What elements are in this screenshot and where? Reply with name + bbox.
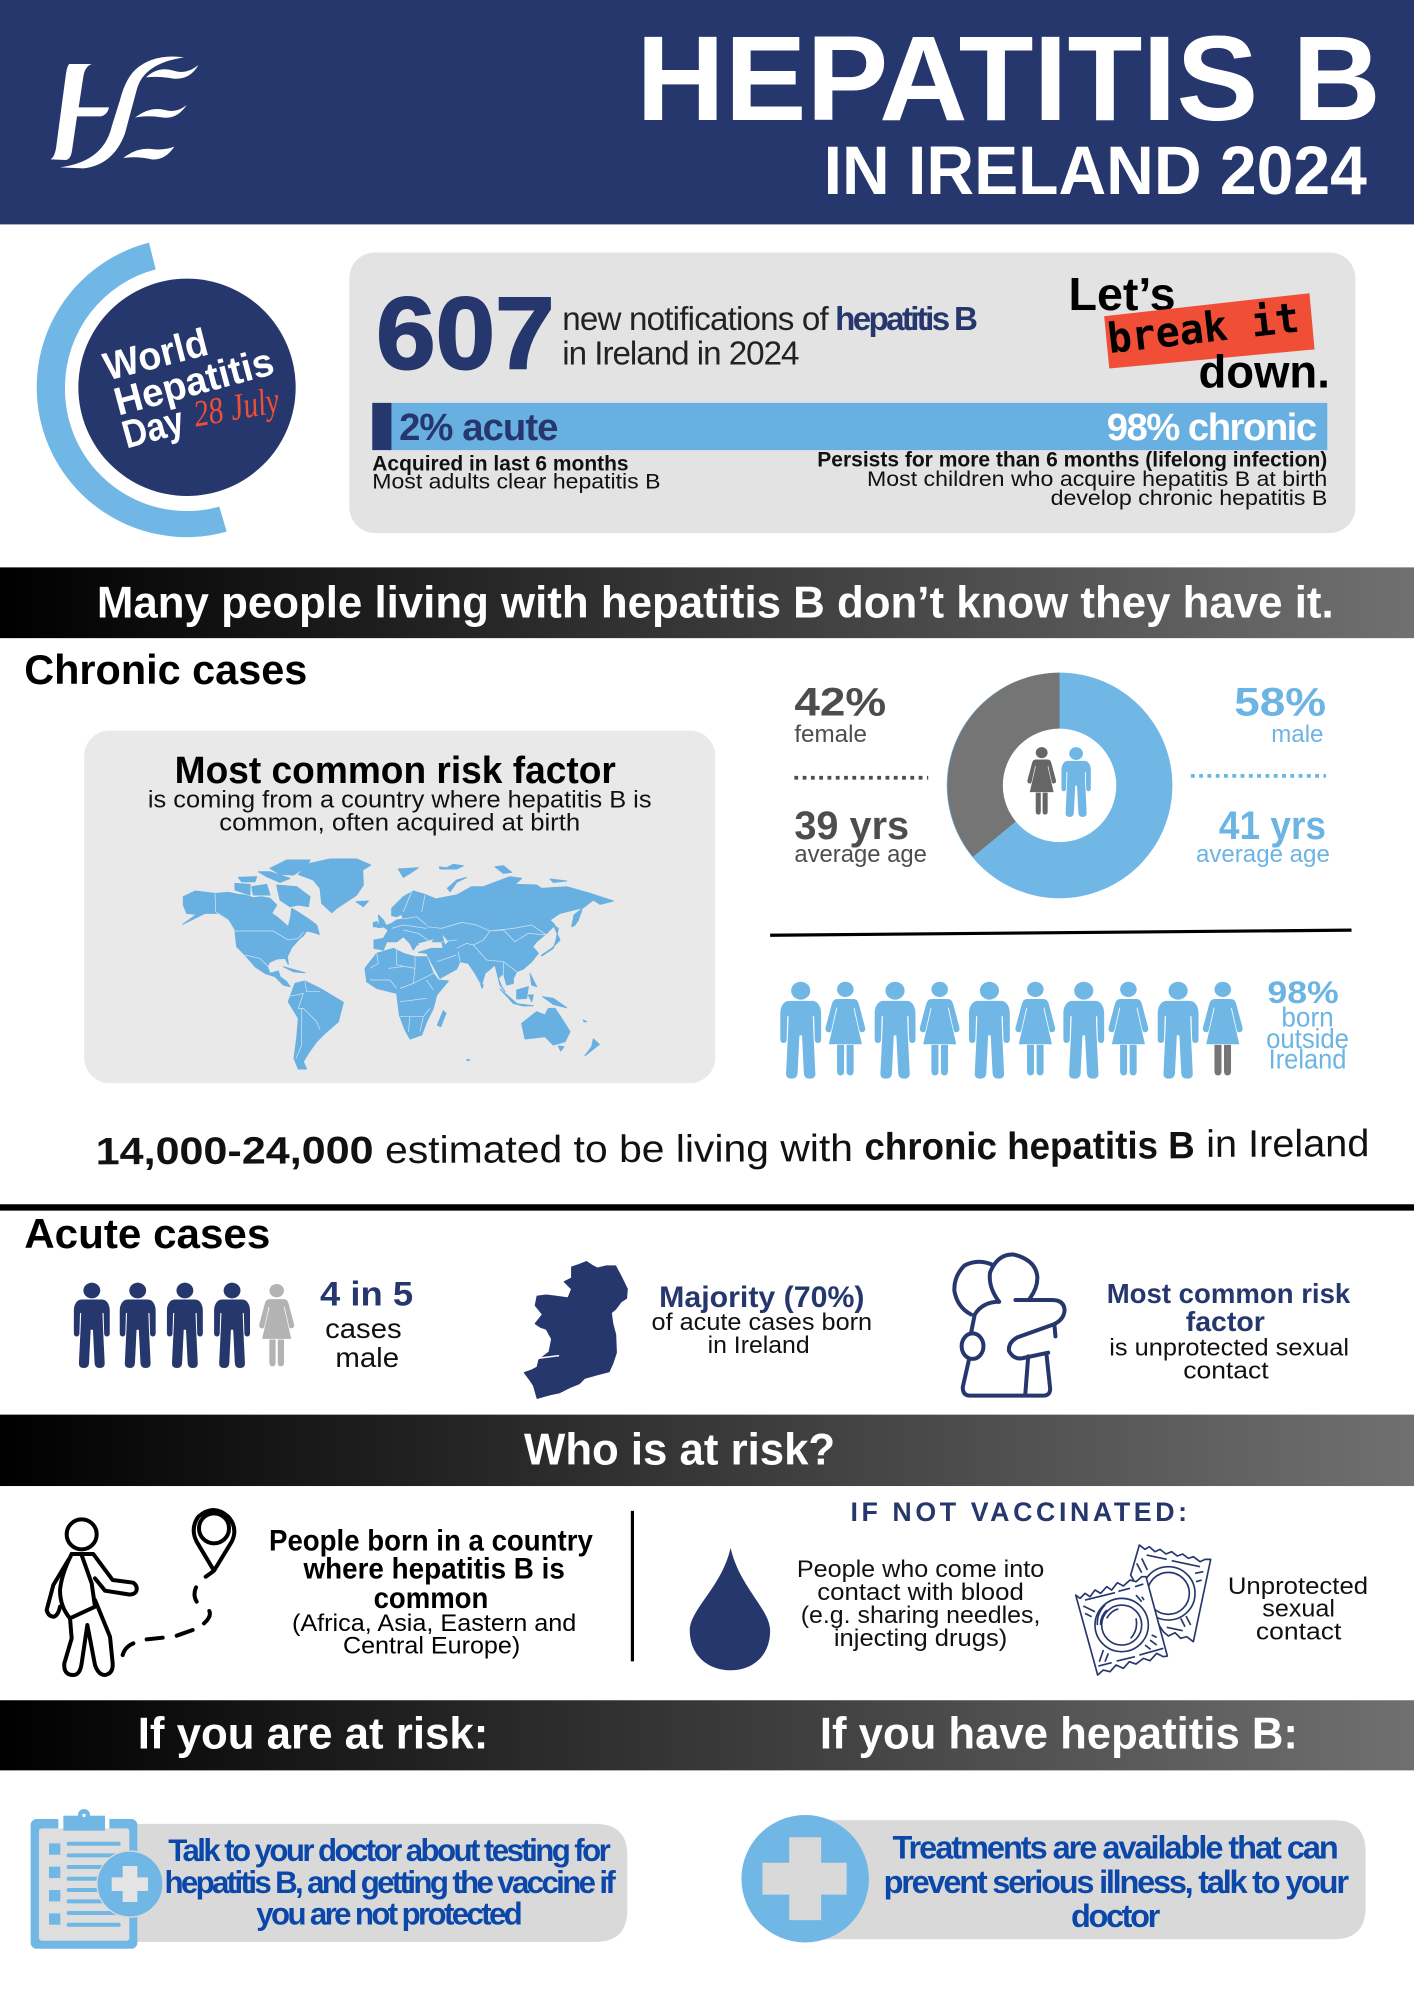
panel: notifications xyxy=(349,252,1355,533)
banner: many people xyxy=(0,567,1414,638)
bar: acute vs chronic xyxy=(372,403,1327,450)
text: testing advice xyxy=(164,1833,616,1932)
banner: who is at risk xyxy=(0,1415,1414,1486)
text: people born in a country: common xyxy=(374,1582,488,1615)
header banner xyxy=(0,0,1414,224)
text: contact with blood xyxy=(797,1556,1044,1652)
text: contact with blood: (e.g. sharing needles, xyxy=(801,1602,1040,1629)
stat: male: average age xyxy=(1196,841,1330,868)
big number 607: 607 xyxy=(376,276,555,390)
risk text: is coming from a country where hepatitis B is xyxy=(148,787,652,813)
icon: clipboard xyxy=(31,1809,163,1949)
acute description: Most adults clear hepatitis B xyxy=(372,470,660,493)
stat: male: 41 yrs xyxy=(1219,804,1326,848)
text: unprotected sexual contact: Unprotected xyxy=(1228,1573,1368,1600)
text: risk factor sexual contact: contact xyxy=(1183,1357,1269,1384)
badge: World Hepatitis Day: 28 July xyxy=(190,380,283,436)
subtitle: IN IRELAND 2024 xyxy=(824,132,1367,209)
stat: 98% born outside Ireland xyxy=(1266,974,1349,1074)
text: risk factor sexual contact: is unprotected sexual xyxy=(1109,1334,1349,1361)
heading: acute cases: Acute cases xyxy=(24,1210,270,1257)
icon: HSE logo xyxy=(51,57,198,168)
text: risk factor sexual contact: Most common risk xyxy=(1107,1278,1351,1309)
acute description: Acquired in last 6 months xyxy=(372,452,629,475)
pictogram: born outside Ireland xyxy=(780,982,1243,1079)
stat: female xyxy=(794,680,928,868)
notifications text: in Ireland in 2024 xyxy=(562,336,799,373)
chronic description: Persists for more than 6 months (lifelong infection) xyxy=(817,449,1327,472)
callout: treatments available xyxy=(741,1815,1366,1942)
text: risk factor sexual contact: factor xyxy=(1186,1306,1265,1337)
text: treatment advice xyxy=(884,1829,1349,1934)
pictogram: 4 in 5 male xyxy=(74,1283,294,1368)
badge: World Hepatitis Day: Day xyxy=(117,398,189,457)
estimate sentence: chronic hepatitis B xyxy=(864,1124,1195,1169)
estimate sentence: estimated to be living with xyxy=(385,1127,853,1172)
stat: 98% born outside Ireland: outside xyxy=(1266,1023,1349,1054)
risk text xyxy=(148,787,652,836)
chronic description xyxy=(817,449,1327,510)
estimate sentence xyxy=(96,1122,1369,1173)
stat: 4 in 5 xyxy=(320,1276,413,1373)
text: testing advice: Talk to your doctor about testing for xyxy=(168,1833,611,1868)
stat: 98% born outside Ireland: born xyxy=(1281,1001,1334,1032)
notifications text: new notifications of xyxy=(562,301,830,338)
text: treatment advice: Treatments are available that can xyxy=(893,1829,1339,1865)
risk text: common, often acquired at birth xyxy=(219,810,580,836)
text: unprotected sexual contact: sexual xyxy=(1262,1596,1335,1623)
text: testing advice: you are not protected xyxy=(256,1897,523,1932)
notifications text xyxy=(562,301,978,373)
badge: World Hepatitis Day: World xyxy=(99,320,213,389)
text: people born in a country: People born in a country xyxy=(269,1524,594,1557)
text: treatment advice: prevent serious illness, talk to your xyxy=(884,1864,1349,1900)
text: people born in a country: (Africa, Asia, Eastern and xyxy=(292,1610,576,1637)
text: contact with blood: contact with blood xyxy=(817,1579,1024,1606)
text: majority born in Ireland: of acute cases born xyxy=(652,1309,872,1336)
panel: most common risk factor xyxy=(84,731,715,1083)
banner: advice headings: If you are at risk: xyxy=(138,1710,488,1759)
icon: condom packets xyxy=(1076,1545,1211,1675)
banner: many people: Many people living with hepatitis B don’t know they have it. xyxy=(97,579,1334,628)
chronic description: develop chronic hepatitis B xyxy=(1051,487,1327,510)
donut chart: sex split xyxy=(947,673,1172,898)
bar: acute vs chronic: 2% acute xyxy=(399,406,558,449)
heading: chronic cases: Chronic cases xyxy=(24,646,307,693)
acute description xyxy=(372,452,660,493)
risk heading: Most common risk factor xyxy=(175,749,616,792)
icon: woman and man xyxy=(1027,747,1091,817)
text: majority born in Ireland: in Ireland xyxy=(708,1332,810,1359)
stat: male: 58% xyxy=(1234,680,1326,724)
bar: acute vs chronic: 98% chronic xyxy=(1107,406,1317,449)
stat: male xyxy=(1191,680,1330,868)
stat: female: 42% xyxy=(794,680,886,724)
banner: advice headings xyxy=(0,1700,1414,1770)
banner: advice headings: If you have hepatitis B: xyxy=(820,1710,1298,1759)
icon: medical cross xyxy=(741,1815,869,1942)
stat: 98% born outside Ireland: Ireland xyxy=(1269,1043,1346,1074)
title: HEPATITIS B xyxy=(636,10,1381,146)
heading: if not vaccinated: IF NOT VACCINATED: xyxy=(850,1497,1187,1527)
text: majority born in Ireland xyxy=(652,1281,872,1359)
text: people born in a country: where hepatitis B is xyxy=(303,1552,565,1585)
stat: 4 in 5: 4 in 5 xyxy=(320,1276,413,1314)
text: contact with blood: injecting drugs) xyxy=(834,1625,1007,1652)
text: people born in a country: Central Europe) xyxy=(343,1633,520,1660)
callout: let's break it down: break it xyxy=(1105,294,1302,363)
callout: let's break it down: down. xyxy=(1199,346,1330,398)
text: people born in a country xyxy=(269,1524,594,1660)
text: risk factor sexual contact xyxy=(1107,1278,1351,1384)
callout: let's break it down xyxy=(1068,268,1330,398)
stat: male: male xyxy=(1271,721,1323,748)
stat: 4 in 5: male xyxy=(335,1342,399,1373)
text: majority born in Ireland: Majority (70%) xyxy=(659,1281,864,1314)
stat: female: 39 yrs xyxy=(794,804,909,848)
text: testing advice: hepatitis B, and getting the vaccine if xyxy=(164,1865,616,1900)
callout: talk to your doctor xyxy=(31,1809,627,1949)
text: unprotected sexual contact: contact xyxy=(1256,1619,1342,1646)
stat: 4 in 5: cases xyxy=(325,1313,402,1344)
icon: map of Ireland xyxy=(525,1262,627,1398)
estimate sentence: in Ireland xyxy=(1206,1122,1369,1166)
estimate sentence: 14,000-24,000 xyxy=(96,1129,374,1173)
text: contact with blood: People who come into xyxy=(797,1556,1044,1583)
icon: blood drop xyxy=(690,1548,770,1670)
icon: traveller with location pin xyxy=(47,1510,234,1675)
stat: 98% born outside Ireland: 98% xyxy=(1267,974,1339,1010)
badge: World Hepatitis Day xyxy=(37,243,296,537)
notifications text: hepatitis B xyxy=(835,301,978,338)
world map xyxy=(183,859,613,1069)
badge: World Hepatitis Day: Hepatitis xyxy=(109,340,278,424)
callout: let's break it down: Let’s xyxy=(1068,268,1176,320)
banner: who is at risk: Who is at risk? xyxy=(524,1425,835,1474)
chronic description: Most children who acquire hepatitis B at birth xyxy=(867,468,1327,491)
text: unprotected sexual contact xyxy=(1228,1573,1368,1646)
icon: embrace xyxy=(954,1254,1065,1396)
text: treatment advice: doctor xyxy=(1071,1898,1161,1934)
stat: female: average age xyxy=(794,841,927,868)
stat: female: female xyxy=(794,721,867,748)
